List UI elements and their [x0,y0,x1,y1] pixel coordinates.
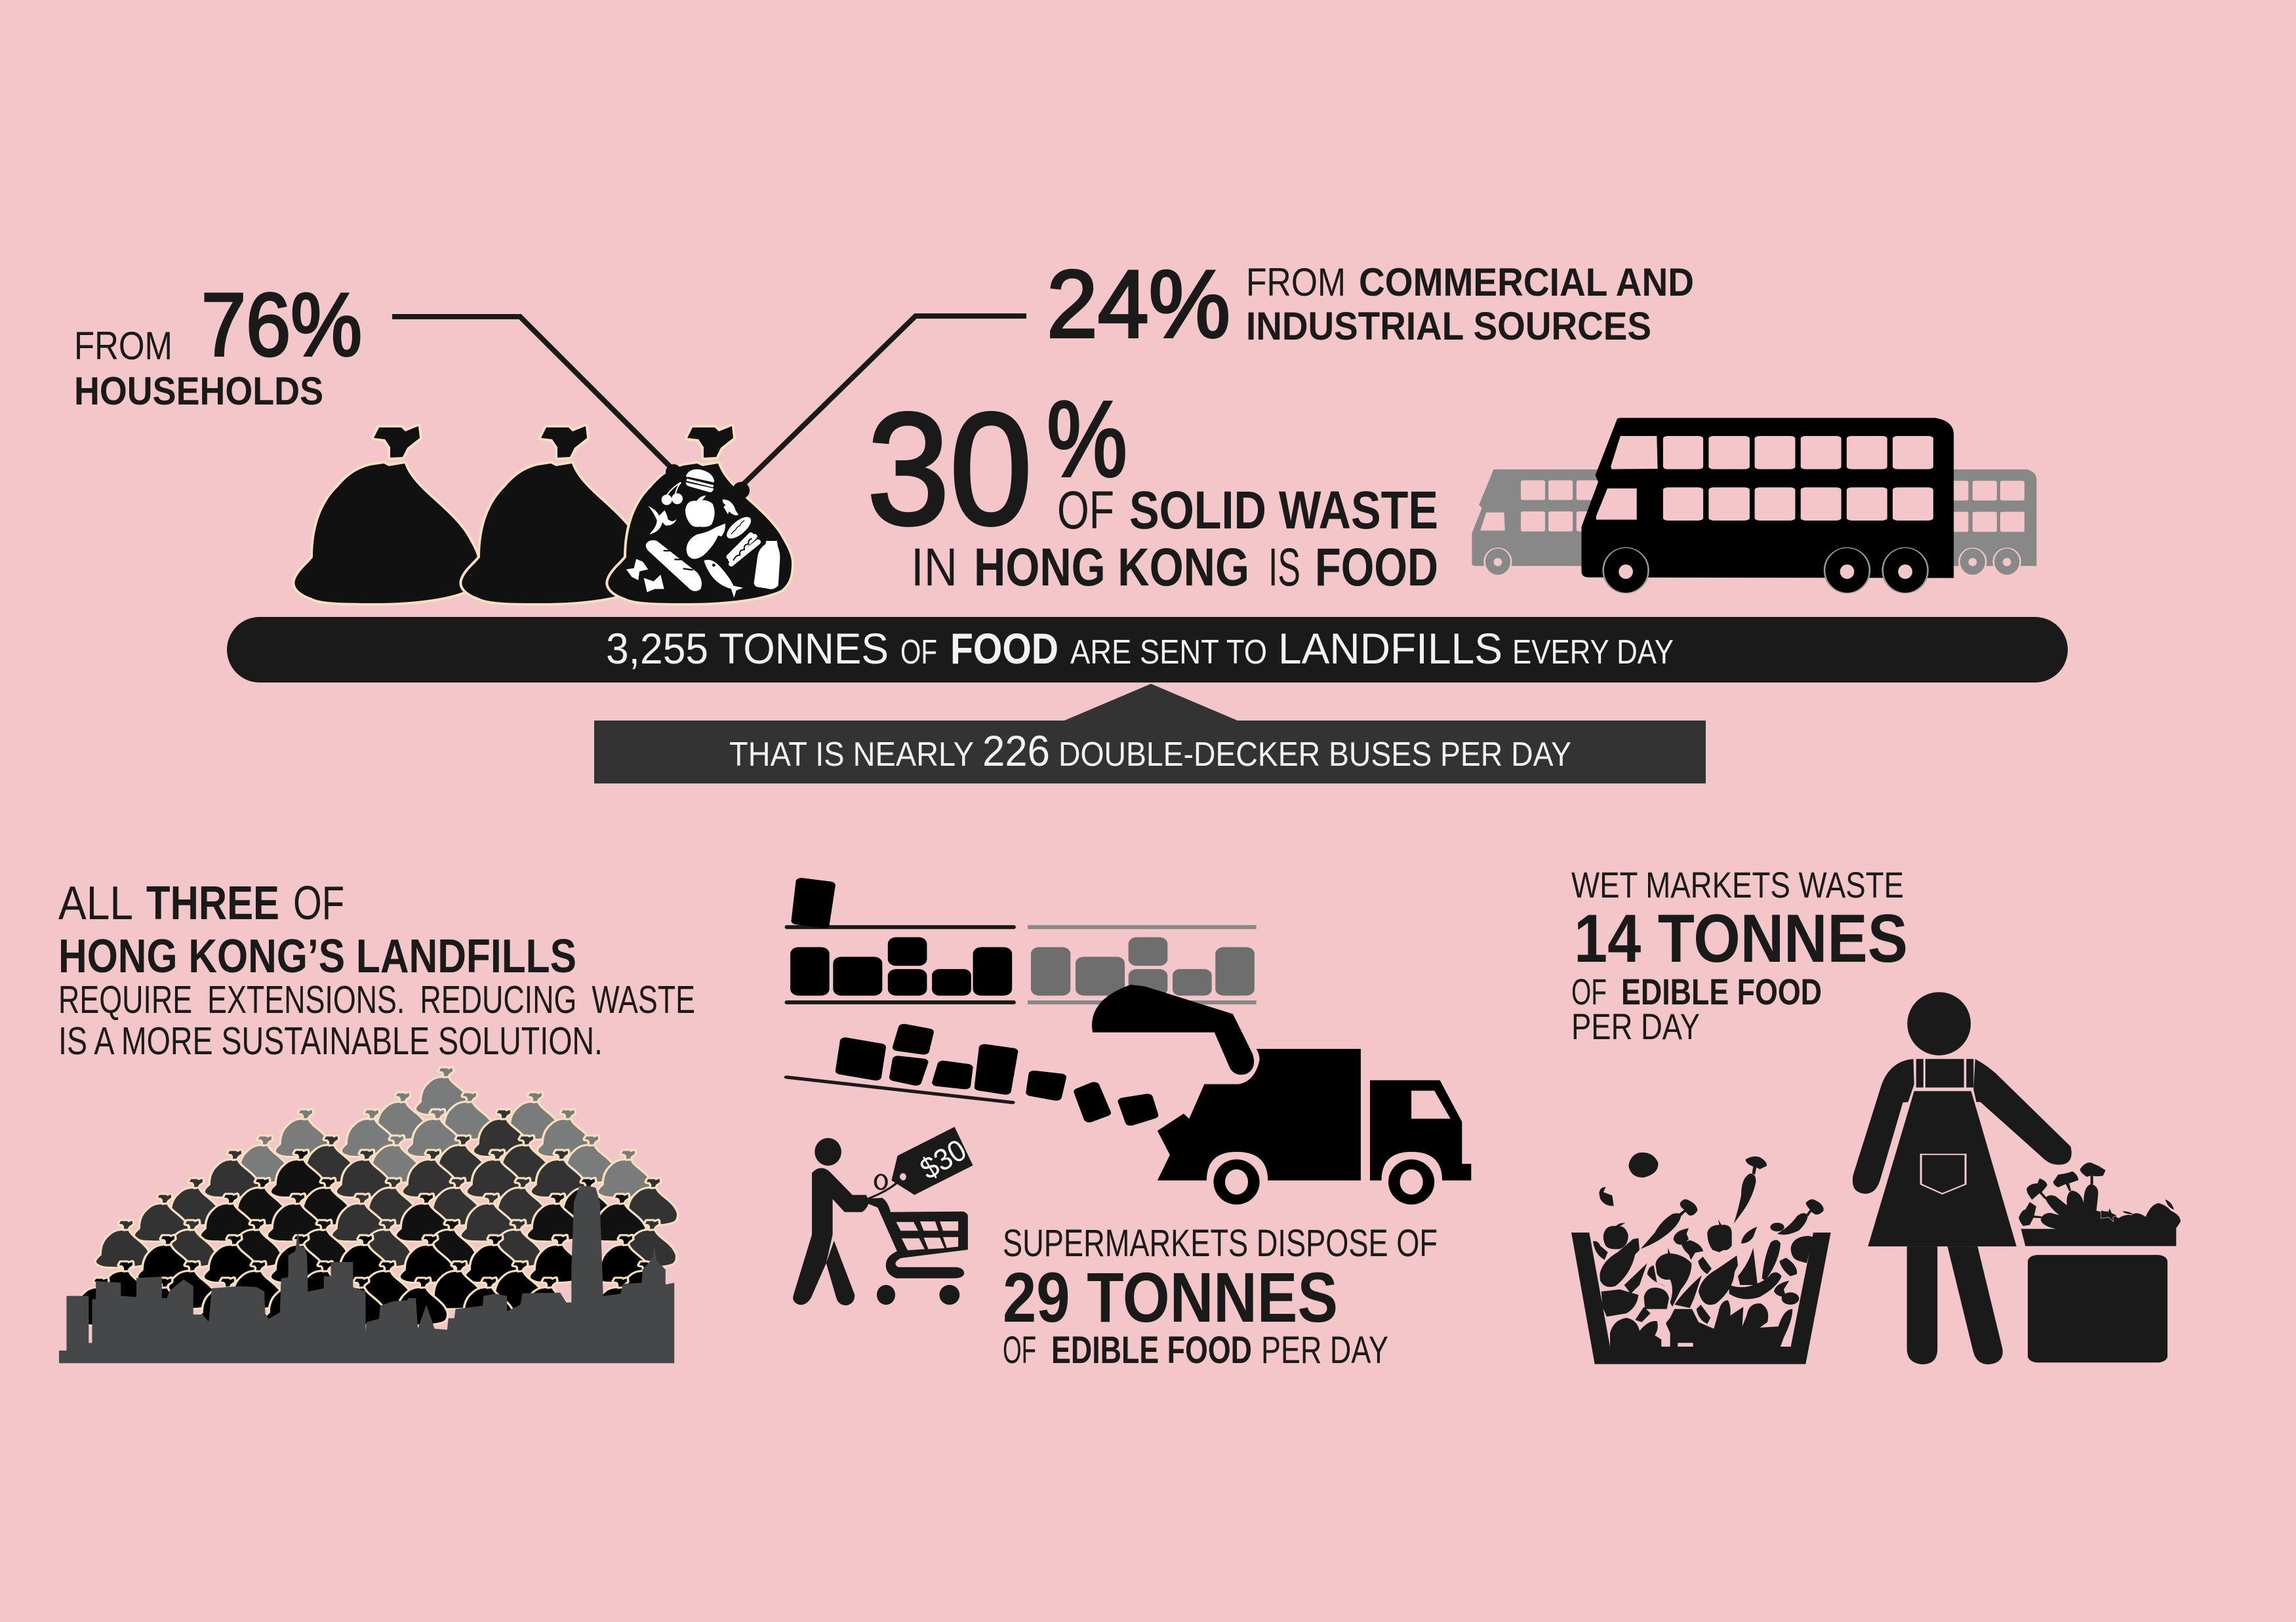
text block: wet markets: WET MARKETS WASTE [1571,864,1904,905]
text block: supermarkets: 29 TONNES [1003,1257,1338,1337]
text block: supermarkets: EDIBLE FOOD [1051,1329,1252,1372]
illustration: Hong Kong skyline [59,1185,674,1363]
text block: supermarkets: PER DAY [1261,1329,1388,1372]
icon: basket of vegetables [1571,1153,1831,1364]
illustration: mountain of garbage bags [71,1068,677,1324]
text block: wet markets: EDIBLE FOOD [1621,971,1822,1012]
heading: 30% of solid waste in Hong Kong is food: FOOD [1315,538,1438,597]
callout: 226 double-decker buses per day: THAT IS NEARLY [729,736,974,774]
text block: landfills [58,877,695,1063]
heading: 30% of solid waste in Hong Kong is food: OF [1057,481,1114,540]
heading: 30% of solid waste in Hong Kong is food: % [1047,379,1127,499]
text block: landfills: OF [293,877,344,930]
banner: 3,255 tonnes of food sent to landfills: OF [900,633,937,671]
callout: 226 double-decker buses per day [594,684,1706,783]
label: from 76% households [74,275,362,413]
icon: shopper with cart [793,1138,968,1305]
label: from 76% households: 76% [201,275,362,374]
icon: double-decker buses [1472,418,2036,593]
icon: price tag [868,1127,973,1198]
text block: landfills: THREE [146,877,279,930]
text block: wet markets [1571,864,1908,1047]
illustration: wet market vendor, basket and crate [1571,992,2181,1364]
text block: landfills: REQUIRE EXTENSIONS. REDUCING WASTE [58,978,695,1021]
label: from 76% households: FROM [74,324,172,368]
icon: grey product boxes [1031,937,1255,996]
label: from 76% households: HOUSEHOLDS [74,369,323,413]
text block: supermarkets: OF [1003,1329,1036,1372]
banner: 3,255 tonnes of food sent to landfills [227,617,2068,682]
icon: grey bus behind [1472,469,2036,575]
icon: black bus in front [1581,418,1954,593]
icon: garbage truck [1092,985,1471,1204]
icon: vendor in apron [1853,992,2072,1364]
text block: wet markets: 14 TONNES [1574,901,1908,977]
heading: 30% of solid waste in Hong Kong is food: HONG KONG [974,538,1249,597]
label: 24% from commercial and industrial sources: COMMERCIAL AND [1359,260,1694,304]
heading: 30% of solid waste in Hong Kong is food: IS [1268,538,1300,597]
banner: 3,255 tonnes of food sent to landfills: FOOD [950,624,1058,673]
label: 24% from commercial and industrial sources: 24% [1047,250,1230,357]
banner: 3,255 tonnes of food sent to landfills: EVERY DAY [1512,633,1674,671]
shelves [785,925,1257,1103]
label: 24% from commercial and industrial sources [1047,250,1694,357]
leader line: households to food bag [392,317,681,480]
icon: crate with vegetables [2019,1162,2181,1362]
text block: landfills: HONG KONG’S LANDFILLS [58,930,576,983]
heading: 30% of solid waste in Hong Kong is food [867,379,1438,597]
price on tag: $30 [914,1132,972,1186]
callout: 226 double-decker buses per day: DOUBLE-DECKER BUSES PER DAY [1058,736,1571,774]
heading: 30% of solid waste in Hong Kong is food: 30 [867,380,1032,558]
text block: landfills: ALL [58,877,133,930]
icon: food items inside third bag [626,469,780,598]
banner: 3,255 tonnes of food sent to landfills: 3,255 TONNES [606,624,889,673]
text block: wet markets: PER DAY [1571,1006,1700,1047]
icon: three garbage bags [294,426,792,603]
illustration: supermarket shelves, truck and shopper [785,882,1471,1305]
text block: landfills: IS A MORE SUSTAINABLE SOLUTION. [58,1019,603,1063]
icon: black product boxes [790,882,1153,1122]
leader line: commercial to food bag [733,316,1026,499]
label: 24% from commercial and industrial sources: INDUSTRIAL SOURCES [1246,304,1651,348]
heading: 30% of solid waste in Hong Kong is food: SOLID WASTE [1129,481,1438,540]
banner: 3,255 tonnes of food sent to landfills: ARE SENT TO [1070,633,1267,671]
banner: 3,255 tonnes of food sent to landfills: LANDFILLS [1278,624,1502,673]
text block: supermarkets: SUPERMARKETS DISPOSE OF [1003,1222,1438,1265]
text block: supermarkets [1003,1222,1438,1372]
callout: 226 double-decker buses per day: 226 [982,726,1050,775]
text block: wet markets: OF [1571,971,1607,1012]
label: 24% from commercial and industrial sources: FROM [1246,260,1346,304]
heading: 30% of solid waste in Hong Kong is food: IN [911,538,957,597]
